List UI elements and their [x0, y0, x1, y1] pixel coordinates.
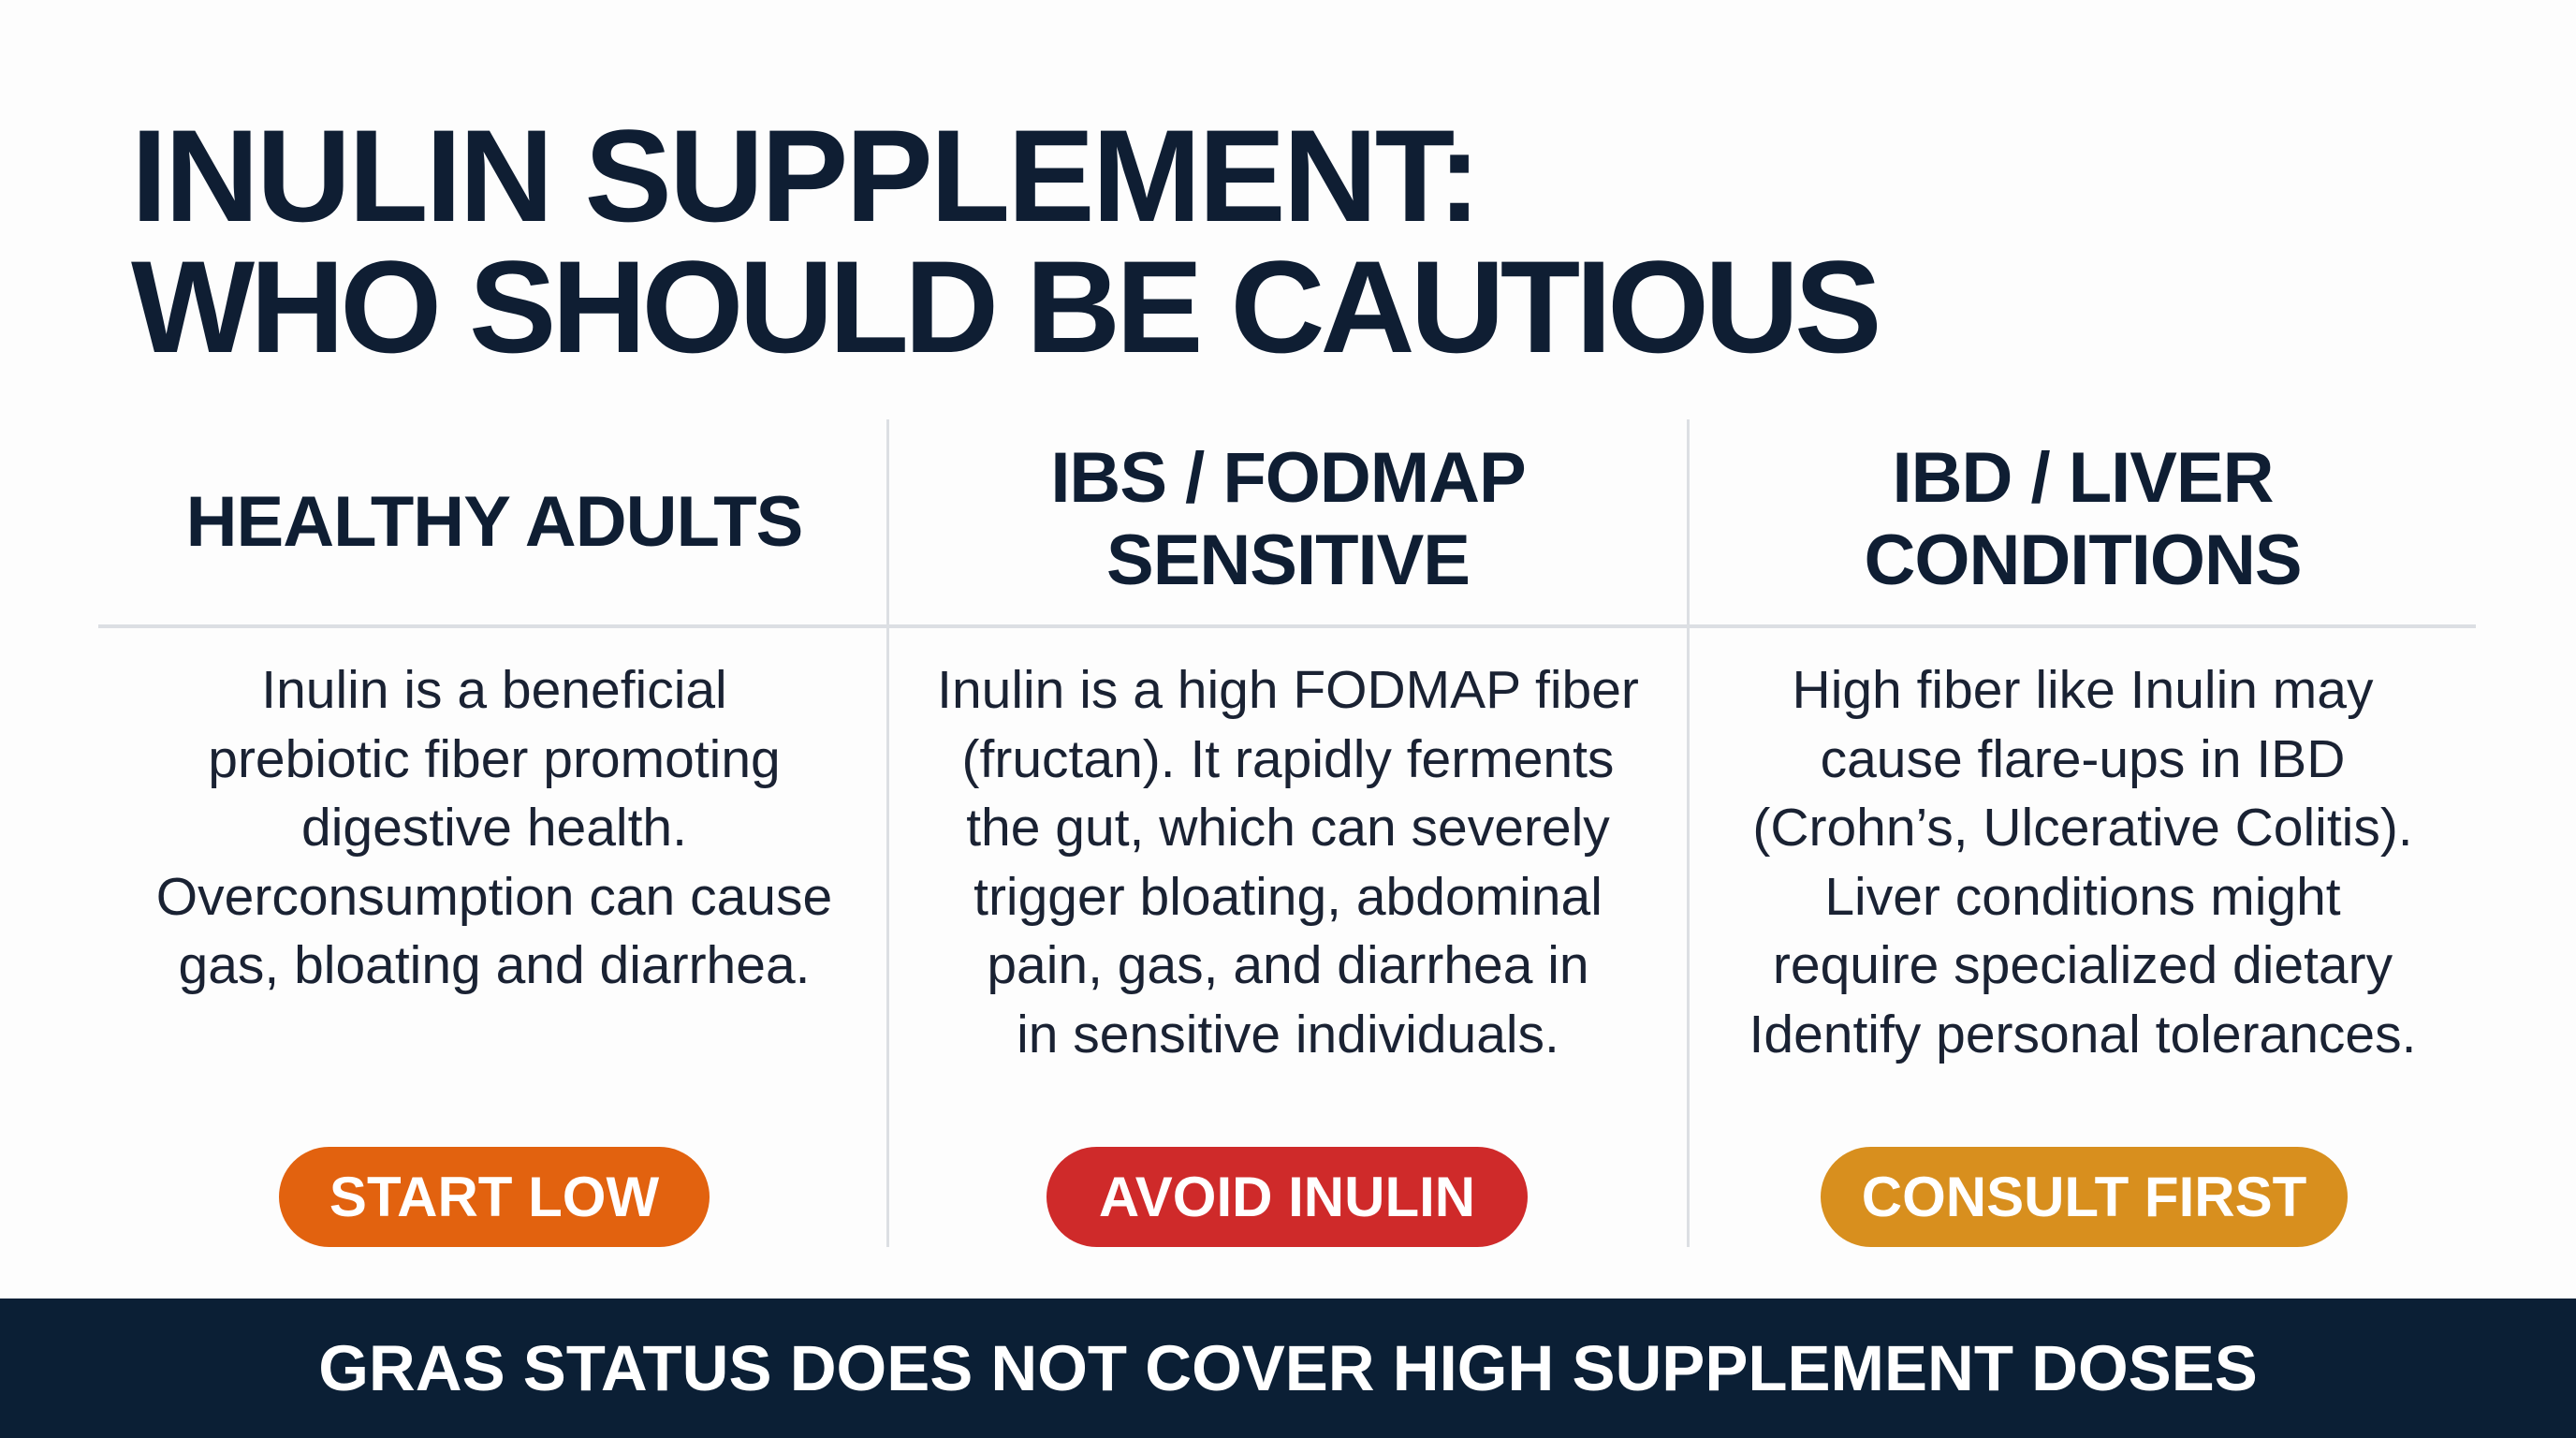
- text: IBD: cause flare-ups in IBD: [1821, 728, 2345, 788]
- header: IBS / FODMAP sensitive: [1050, 438, 1526, 600]
- header: IBD / liver conditions: [1864, 438, 2302, 600]
- text: healthy adults: gas, bloating and diarrhea.: [178, 935, 810, 995]
- text: IBS: the gut, which can severely: [966, 798, 1610, 858]
- text: IBD: (Crohn’s, Ulcerative Colitis).: [1752, 798, 2413, 858]
- title: [131, 102, 1878, 380]
- text: healthy adults: digestive health.: [301, 798, 687, 858]
- button: consult first: CONSULT FIRST: [1862, 1166, 2306, 1228]
- text: IBS: pain, gas, and diarrhea in: [987, 935, 1589, 995]
- text: IBS: [937, 660, 1639, 1064]
- header: IBS / FODMAP sensitive: SENSITIVE: [1106, 521, 1470, 600]
- text: IBS: trigger bloating, abdominal: [973, 867, 1603, 927]
- text: IBS: (fructan). It rapidly ferments: [962, 728, 1614, 788]
- text: IBD: [1749, 660, 2416, 1064]
- footer banner: [0, 1299, 2576, 1438]
- footer banner: GRAS STATUS DOES NOT COVER HIGH SUPPLEMENT DOSES: [318, 1332, 2258, 1404]
- text: IBS: in sensitive individuals.: [1017, 1004, 1559, 1064]
- header: healthy adults: HEALTHY ADULTS: [186, 482, 802, 562]
- button: start low: START LOW: [329, 1166, 659, 1228]
- header: IBS / FODMAP sensitive: IBS / FODMAP: [1050, 438, 1526, 518]
- text: healthy adults: Overconsumption can cause: [156, 867, 832, 927]
- title: WHO SHOULD BE CAUTIOUS: [131, 233, 1878, 380]
- text: healthy adults: prebiotic fiber promoting: [208, 728, 781, 788]
- text: IBD: High fiber like Inulin may: [1793, 660, 2373, 720]
- text: healthy adults: Inulin is a beneficial: [261, 660, 727, 720]
- header: IBD / liver conditions: CONDITIONS: [1864, 521, 2302, 600]
- text: IBD: Identify personal tolerances.: [1749, 1004, 2416, 1064]
- button: avoid inulin: [1046, 1147, 1528, 1247]
- text: IBD: Liver conditions might: [1824, 867, 2341, 927]
- header: IBD / liver conditions: IBD / LIVER: [1892, 438, 2274, 518]
- text: IBS: Inulin is a high FODMAP fiber: [937, 660, 1639, 720]
- button: start low: [279, 1147, 710, 1247]
- text: IBD: require specialized dietary: [1773, 935, 2393, 995]
- title: INULIN SUPPLEMENT:: [131, 102, 1478, 249]
- text: healthy adults: [156, 660, 832, 995]
- button: avoid inulin: AVOID INULIN: [1099, 1166, 1475, 1228]
- button: consult first: [1821, 1147, 2348, 1247]
